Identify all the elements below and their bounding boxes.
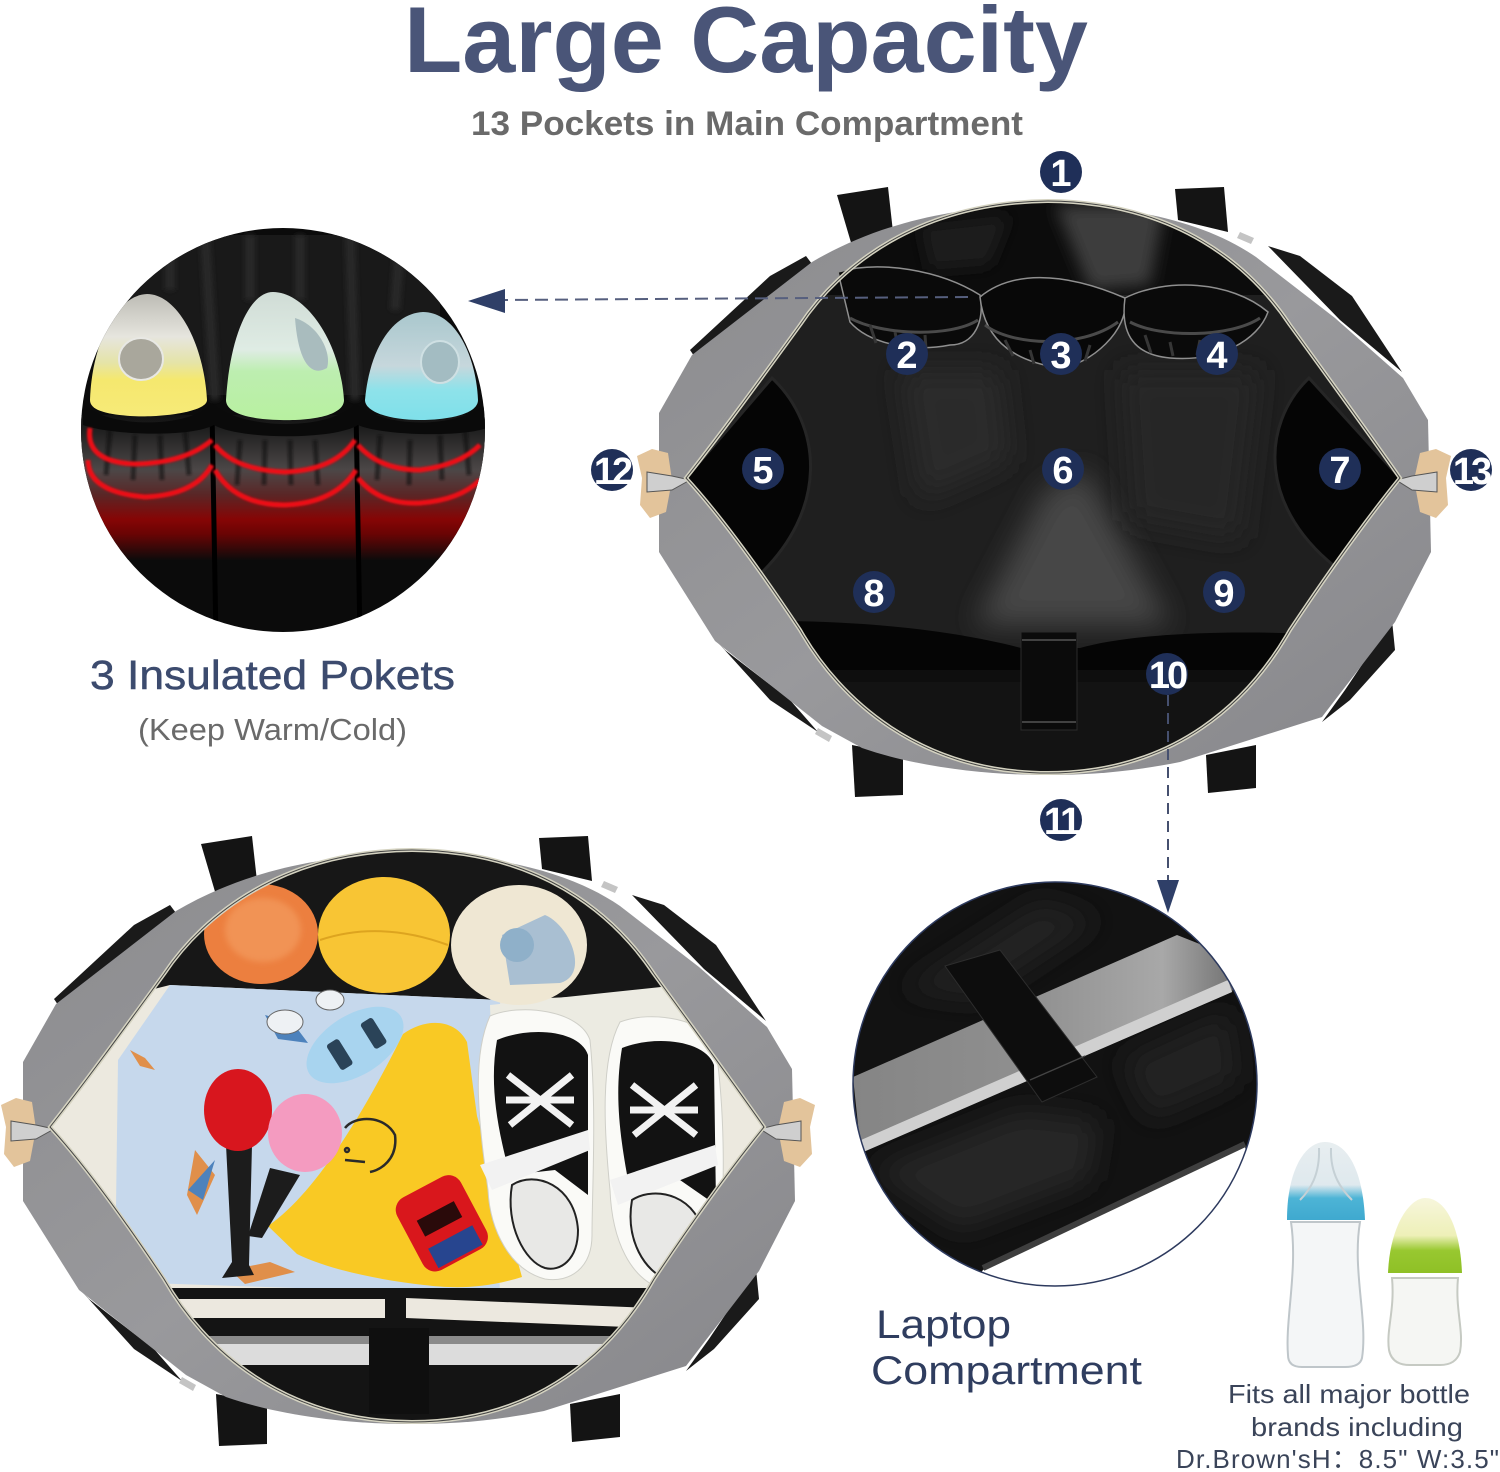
marker 13: 13 — [1453, 451, 1491, 493]
marker 3: 3 — [1050, 335, 1072, 377]
pocket rim — [83, 406, 485, 436]
white area below zipper — [982, 1147, 1246, 1286]
blue bottle — [365, 312, 478, 420]
green bottle — [226, 292, 344, 420]
marker 8 — [853, 571, 895, 615]
bottle fit note — [1176, 1379, 1499, 1472]
bottle fit note: brands including — [1251, 1412, 1463, 1442]
packed bag shell — [1, 836, 815, 1446]
marker 8: 8 — [863, 573, 885, 615]
insulated pockets note: (Keep Warm/Cold) — [138, 712, 407, 747]
icon: large bottle — [1287, 1142, 1365, 1367]
marker 7: 7 — [1329, 450, 1351, 492]
insulated pockets caption: 3 Insulated Pokets — [90, 652, 455, 698]
packed contents — [40, 845, 780, 1428]
orange cup — [204, 884, 318, 984]
yellow bottle — [90, 294, 207, 416]
strap — [369, 1336, 429, 1365]
webbing strap — [1021, 632, 1077, 730]
red heat lines — [88, 428, 480, 505]
arrow: to insulated pockets — [468, 289, 968, 313]
packed bag zipper — [50, 850, 764, 1422]
laptop bar — [853, 935, 1240, 1153]
marker 1 — [1040, 151, 1082, 195]
marker 6: 6 — [1052, 450, 1074, 492]
icon: small bottle — [1388, 1198, 1462, 1365]
number markers — [591, 151, 1492, 843]
marker 10: 10 — [1149, 655, 1187, 697]
right shoe — [605, 1017, 723, 1291]
panel: laptop compartment close-up — [850, 880, 1270, 1300]
zipper — [686, 201, 1400, 773]
pink maraca — [248, 1094, 342, 1238]
laptop caption: Compartment — [871, 1349, 1142, 1393]
books and laptop — [172, 1288, 646, 1420]
three bottle pockets — [838, 267, 1268, 368]
bag interior — [680, 195, 1410, 785]
pocket ruffles — [80, 415, 488, 560]
marker 4: 4 — [1206, 335, 1228, 377]
marker 12: 12 — [594, 451, 632, 493]
yellow ball — [318, 877, 450, 993]
red maraca — [204, 1069, 272, 1278]
panel: open bag interior with numbered pockets — [637, 187, 1451, 797]
marker 9: 9 — [1213, 573, 1235, 615]
bear face — [345, 1119, 395, 1172]
marker 2 — [886, 333, 928, 377]
bottle fit note: Fits all major bottle — [1228, 1379, 1470, 1409]
arrow: to laptop compartment — [1157, 695, 1179, 913]
clothes prints — [130, 990, 344, 1284]
marker 5 — [742, 448, 784, 492]
laptop caption: Laptop — [876, 1303, 1011, 1347]
red toy car — [396, 1175, 488, 1272]
marker 3 — [1040, 333, 1082, 377]
bag shell — [637, 187, 1451, 797]
panel: packed bag — [1, 836, 815, 1446]
blue toy car — [306, 1006, 404, 1084]
marker 7 — [1319, 448, 1361, 492]
marker 1: 1 — [1050, 153, 1072, 195]
white garment — [490, 987, 670, 1288]
marker 2: 2 — [896, 335, 918, 377]
loop strap — [945, 950, 1097, 1102]
clothes — [115, 985, 510, 1295]
panel: insulated pockets close-up — [80, 226, 488, 640]
marker 6 — [1042, 448, 1084, 492]
yellow hat — [268, 1023, 522, 1287]
marker 11: 11 — [1044, 801, 1081, 843]
left shoe — [478, 1010, 594, 1280]
laptop caption — [871, 1303, 1142, 1393]
subtitle: 13 Pockets in Main Compartment — [471, 105, 1023, 143]
marker 4 — [1196, 333, 1238, 377]
cream cup — [451, 885, 587, 1005]
marker 9 — [1203, 571, 1245, 615]
marker 5: 5 — [752, 450, 774, 492]
